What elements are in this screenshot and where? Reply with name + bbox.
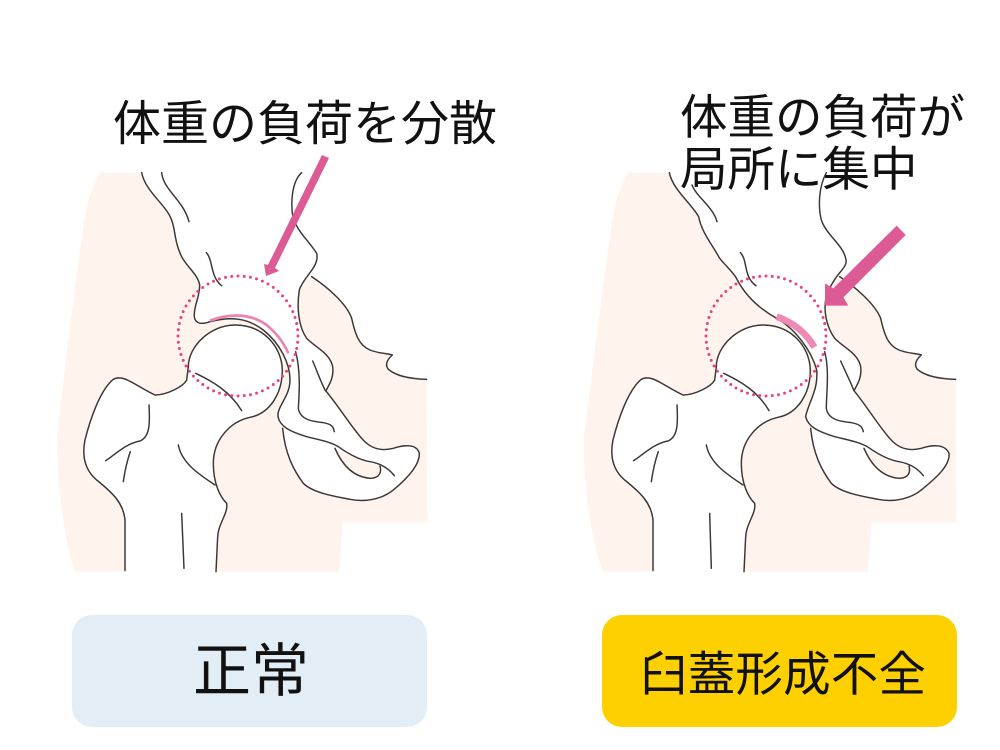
heading: load concentrated: 局所に集中 <box>680 144 918 197</box>
dotted circle: joint area <box>178 276 298 396</box>
label box: acetabular dysplasia: 臼蓋形成不全 <box>640 649 926 702</box>
label box: acetabular dysplasia <box>602 615 957 727</box>
panel: normal hip joint <box>57 98 497 572</box>
heading: load dispersed: 体重の負荷を分散 <box>113 98 497 151</box>
illustration: dysplastic hip bones <box>584 173 956 572</box>
load band: narrow contact <box>777 317 814 347</box>
arrow: dispersed load <box>264 155 329 276</box>
dotted circle: joint area <box>706 276 826 396</box>
illustration: normal hip bones <box>57 173 427 572</box>
arrow: concentrated load <box>825 226 906 306</box>
label box: normal: 正常 <box>193 639 309 704</box>
load band: wide contact <box>210 316 288 353</box>
label box: normal <box>72 615 427 727</box>
heading: load concentrated: 体重の負荷が <box>680 92 965 145</box>
panel: dysplastic hip joint <box>584 92 965 572</box>
